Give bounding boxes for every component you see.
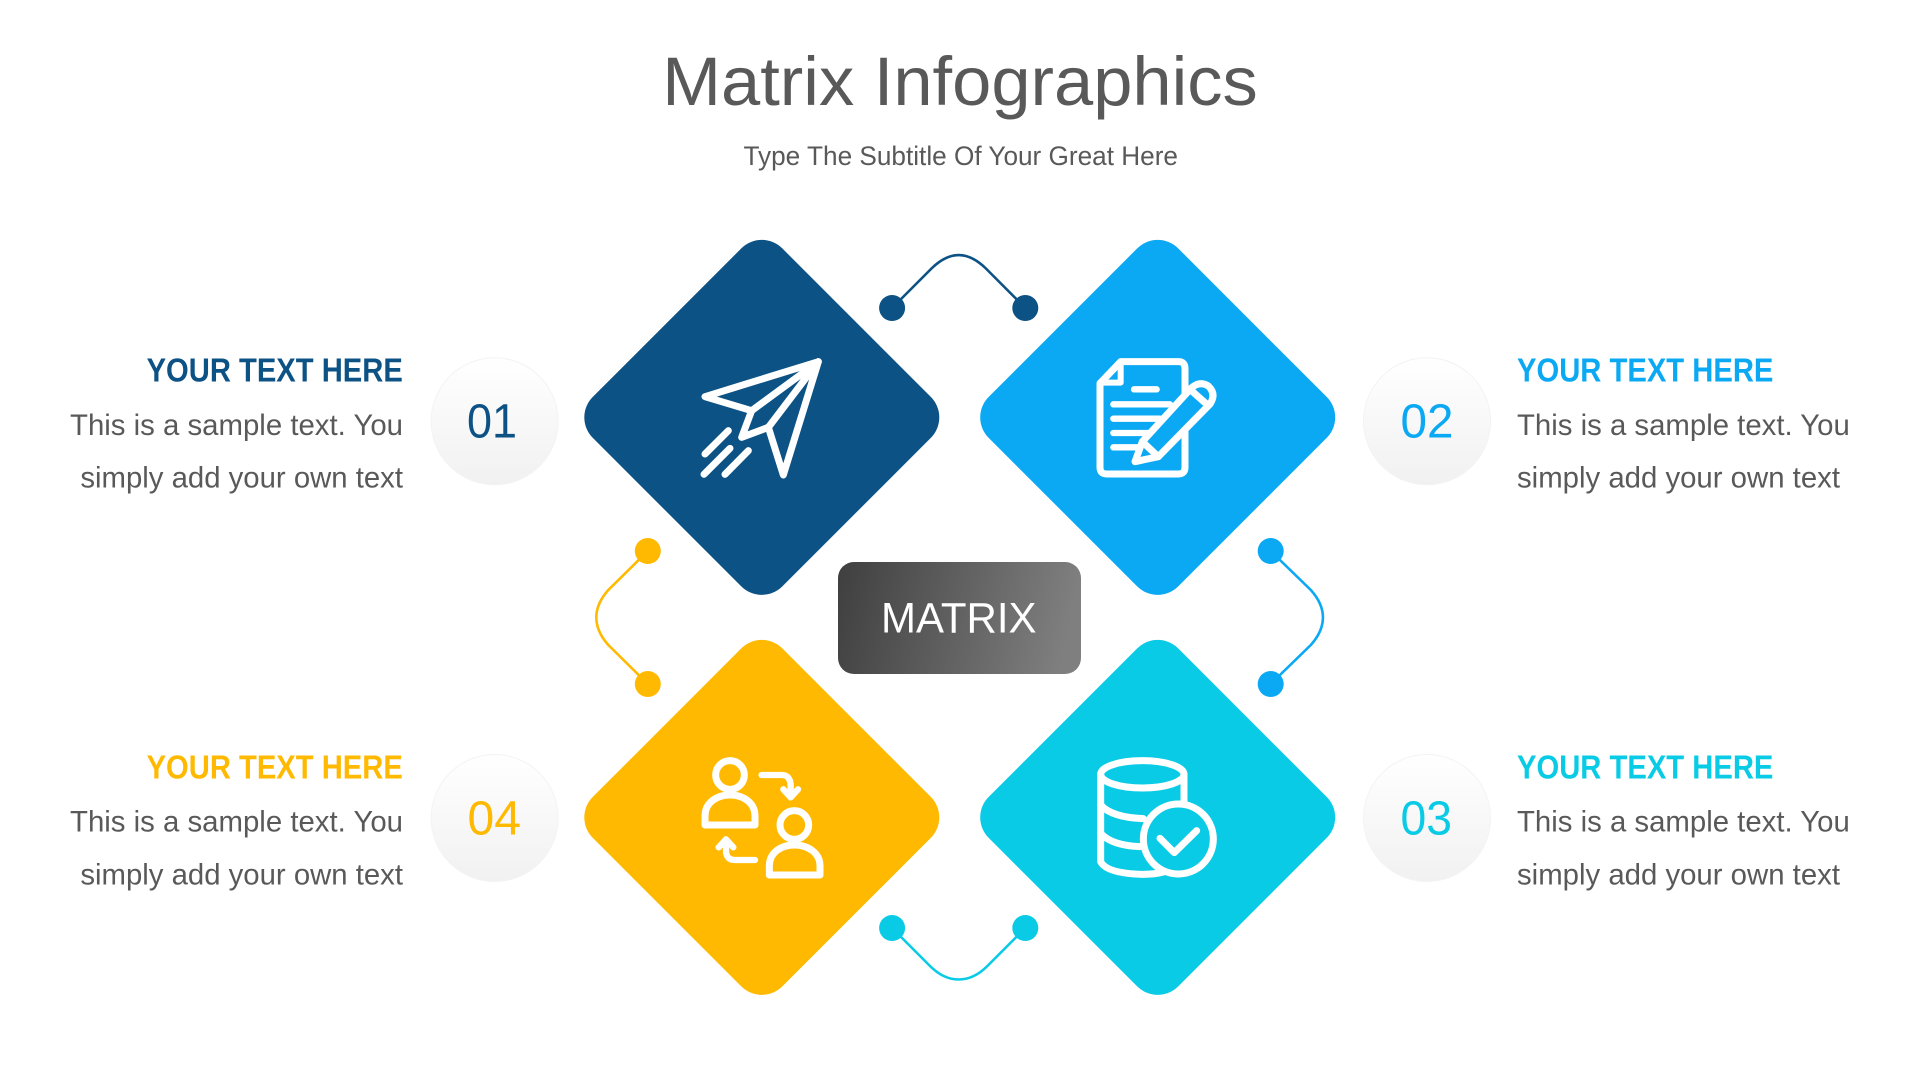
body line 1: This is a sample text. You: [70, 806, 403, 839]
heading: YOUR TEXT HERE: [147, 352, 403, 389]
number badge: 01: 01: [467, 396, 517, 448]
diamond: blue: [968, 228, 1347, 607]
text block: step 01: [70, 352, 403, 495]
connector: top navy: [879, 255, 1038, 321]
number badge: 03: 03: [1400, 792, 1452, 845]
panel: step 02: [968, 228, 1850, 607]
panel: step 03: [968, 628, 1850, 1007]
subtitle: Type The Subtitle Of Your Great Here: [744, 141, 1178, 171]
connector: right blue: [1258, 538, 1323, 697]
icon: people exchange: [705, 761, 820, 875]
body line 1: This is a sample text. You: [70, 409, 403, 442]
number badge: 04: 04: [468, 792, 521, 845]
body line 2: simply add your own text: [1517, 462, 1840, 495]
connector: bottom cyan: [879, 915, 1038, 980]
heading: YOUR TEXT HERE: [1517, 352, 1773, 389]
center box: MATRIX: [838, 562, 1081, 674]
body line 1: This is a sample text. You: [1517, 806, 1850, 839]
diamond: navy: [572, 228, 951, 607]
body line 2: simply add your own text: [80, 858, 403, 891]
diamond: yellow: [572, 628, 951, 1007]
body line 2: simply add your own text: [1517, 858, 1840, 891]
number badge: 02: 02: [1400, 396, 1454, 448]
center box: MATRIX: MATRIX: [881, 595, 1036, 643]
body line 2: simply add your own text: [80, 462, 403, 495]
heading: YOUR TEXT HERE: [1517, 748, 1773, 785]
title: Matrix Infographics: [662, 43, 1258, 120]
icon: paper plane: [704, 362, 818, 475]
connector: left yellow: [596, 538, 661, 697]
text block: step 02: [1517, 352, 1850, 495]
panel: step 04: [70, 628, 951, 1007]
number badge: 02: [1364, 358, 1490, 485]
text block: step 03: [1517, 748, 1850, 891]
number badge: 01: [431, 358, 558, 485]
icon: database with check: [1101, 761, 1213, 874]
heading: YOUR TEXT HERE: [147, 748, 403, 785]
body line 1: This is a sample text. You: [1517, 409, 1850, 442]
number badge: 03: [1364, 754, 1490, 882]
text block: step 04: [70, 748, 403, 891]
icon: document and pencil: [1100, 362, 1213, 474]
number badge: 04: [431, 754, 558, 882]
panel: step 01: [70, 228, 951, 607]
diamond: cyan: [968, 628, 1347, 1007]
